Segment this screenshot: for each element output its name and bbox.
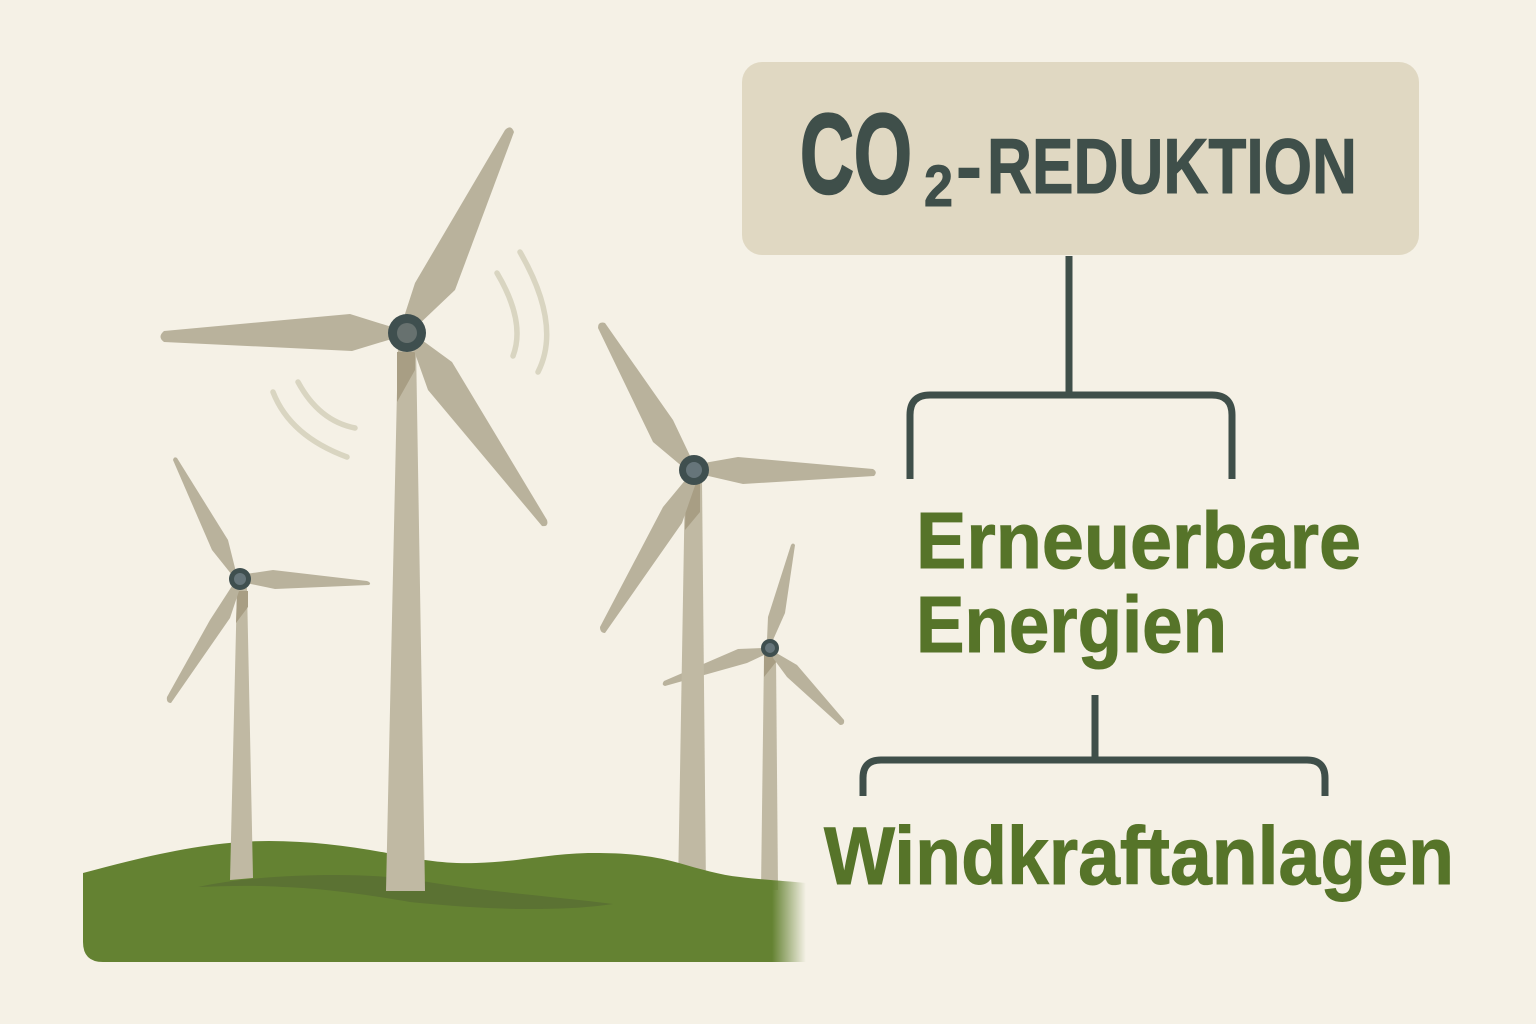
title hyphen: - xyxy=(956,122,982,210)
heading: Energien: Energien xyxy=(916,580,1227,669)
turbine: large main xyxy=(160,127,547,891)
connector: Energien to Windkraftanlagen xyxy=(863,695,1325,796)
motion arcs: left of rotor xyxy=(273,382,355,457)
turbine: small right xyxy=(663,544,844,890)
heading: Erneuerbare: Erneuerbare xyxy=(916,496,1361,585)
title subscript: 2 xyxy=(924,154,953,219)
connector: title to Erneuerbare Energien xyxy=(910,256,1232,479)
turbine: small left xyxy=(167,457,370,880)
ground shadow xyxy=(198,875,613,909)
turbine: medium right xyxy=(598,323,876,890)
title text: CO xyxy=(800,91,912,217)
motion arcs: right of rotor xyxy=(497,252,547,372)
ground: green hills xyxy=(83,841,806,962)
title box xyxy=(742,62,1419,255)
heading: Windkraftanlagen: Windkraftanlagen xyxy=(824,811,1454,902)
title suffix: REDUKTION xyxy=(987,122,1357,210)
